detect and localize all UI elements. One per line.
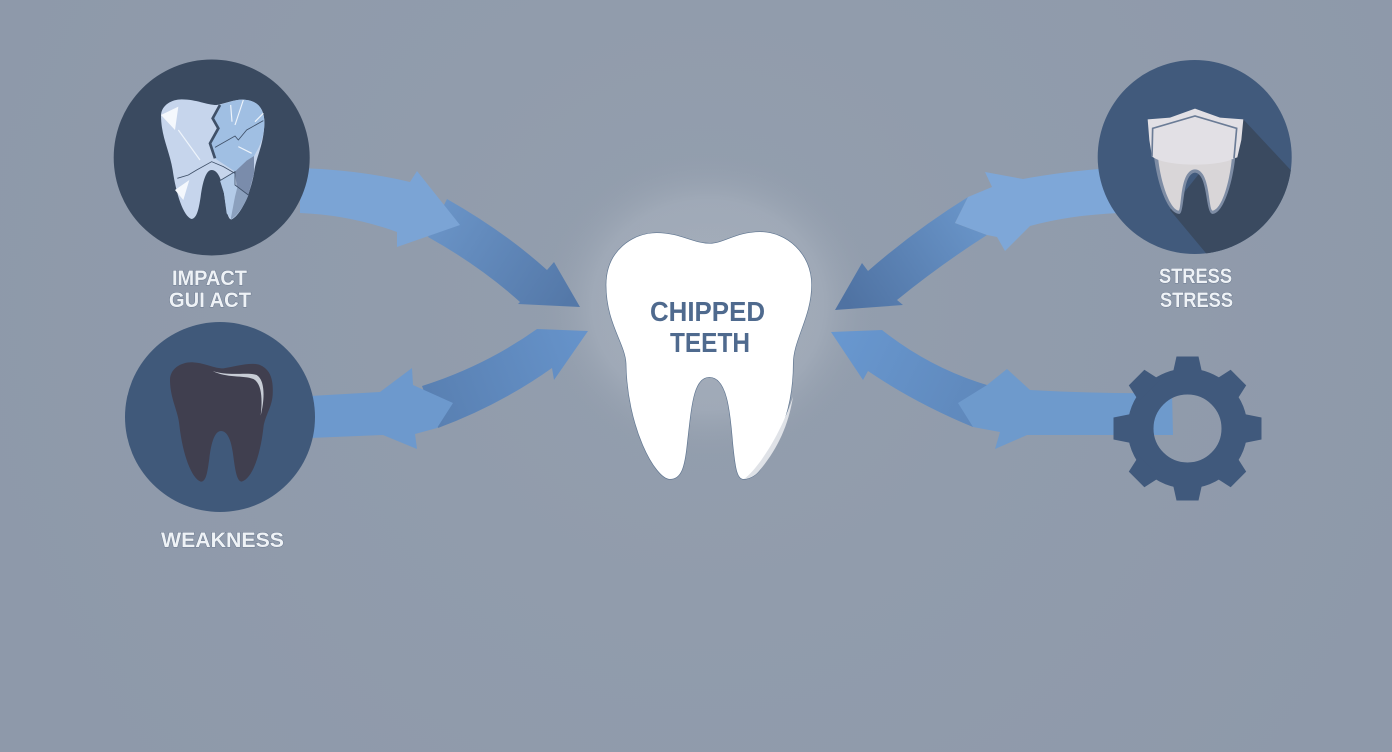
arrow: gear to tooth, first segment <box>958 369 1173 449</box>
weakness circle <box>125 322 315 512</box>
label: impact: IMPACT <box>172 267 247 290</box>
label: impact: GUI ACT <box>169 289 251 312</box>
label: stress: STRESS <box>1160 289 1233 312</box>
icon: fractured tooth <box>161 99 264 219</box>
title: chipped teeth <box>650 296 765 358</box>
arrow: stress to tooth, second segment <box>835 197 987 310</box>
icon: gear <box>1114 356 1262 500</box>
label: stress: STRESS <box>1159 265 1232 288</box>
icon: shielded tooth <box>1148 109 1243 214</box>
label: stress <box>1159 265 1233 312</box>
long shadow <box>1170 119 1291 254</box>
title: chipped teeth: CHIPPED <box>650 296 765 327</box>
arrow: weakness to tooth, first segment <box>310 368 453 449</box>
arrow: gear to tooth, second segment <box>831 330 987 427</box>
impact circle <box>114 60 310 256</box>
arrow: impact to tooth, first segment <box>300 168 460 247</box>
stress circle <box>1098 60 1292 254</box>
central tooth <box>606 232 812 479</box>
tooth shape <box>606 232 812 479</box>
label: impact <box>169 267 251 312</box>
panel: stress icon <box>1098 60 1292 254</box>
title: chipped teeth: TEETH <box>670 327 750 358</box>
arrow: weakness to tooth, second segment <box>422 329 588 428</box>
arrow: stress to tooth, first segment <box>955 168 1120 251</box>
panel: impact icon <box>114 60 310 256</box>
central glow <box>543 155 873 455</box>
arrow: impact to tooth, second segment <box>428 199 580 307</box>
label: weakness: WEAKNESS <box>161 529 284 552</box>
icon: dark tooth <box>170 362 273 482</box>
panel: weakness icon <box>125 322 315 512</box>
